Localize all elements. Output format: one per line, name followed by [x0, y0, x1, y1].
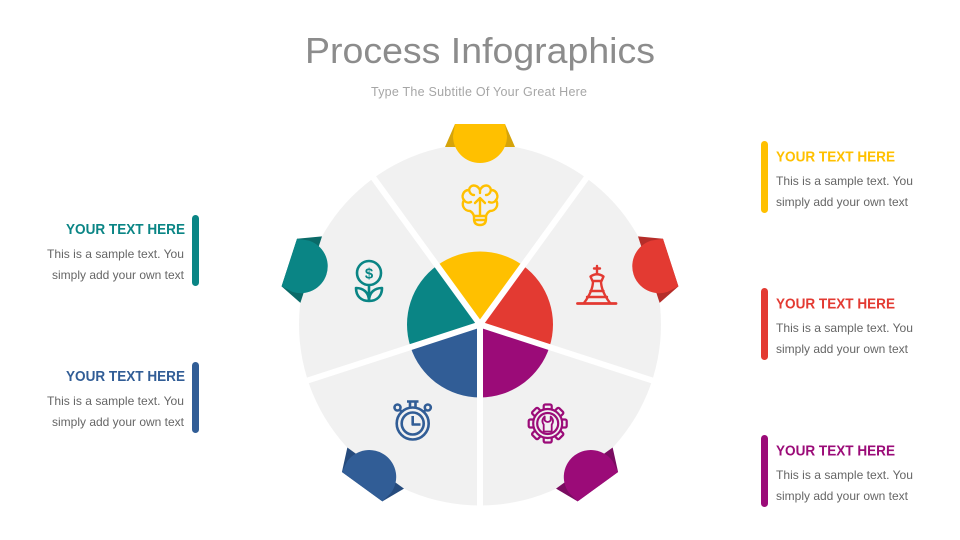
wheel spokes [305, 176, 655, 508]
icon: money plant: $ [365, 266, 374, 282]
callout: purple [761, 435, 913, 507]
callout: yellow: YOUR TEXT HERE [776, 150, 895, 166]
hub sector: purple [445, 299, 558, 409]
callout: blue: YOUR TEXT HERE [66, 369, 185, 385]
callout: blue: simply add your own text [52, 415, 185, 429]
hub sector: yellow [437, 252, 523, 324]
callout: red: YOUR TEXT HERE [776, 296, 895, 312]
tab: red [623, 229, 682, 308]
subtitle: Type The Subtitle Of Your Great Here [371, 85, 587, 99]
callout: yellow: This is a sample text. You [776, 174, 913, 188]
callout: red: This is a sample text. You [776, 321, 913, 335]
hub sector: teal [397, 261, 493, 365]
icon: brain bulb [463, 186, 497, 225]
callout: yellow: simply add your own text [776, 195, 909, 209]
icon: gear with wrench [529, 404, 567, 442]
icon: chess king [578, 266, 616, 304]
tab: yellow [445, 124, 515, 163]
callout: teal: YOUR TEXT HERE [66, 222, 185, 238]
callout: blue: This is a sample text. You [47, 394, 184, 408]
icon: stopwatch [394, 402, 431, 440]
hub sector: blue [402, 299, 515, 409]
title: Process Infographics [305, 30, 655, 71]
icon: money plant [356, 261, 382, 301]
callout: purple: simply add your own text [776, 489, 909, 503]
hub sector: red [467, 261, 563, 365]
tab: teal [278, 229, 337, 308]
callout: teal: This is a sample text. You [47, 247, 184, 261]
callout: teal: simply add your own text [52, 268, 185, 282]
tab: blue [334, 435, 413, 507]
callout: purple: YOUR TEXT HERE [776, 444, 895, 460]
wheel background [299, 144, 661, 506]
callout: purple: This is a sample text. You [776, 468, 913, 482]
callout: red [761, 288, 913, 360]
tab: purple [547, 435, 626, 507]
callout: red: simply add your own text [776, 342, 909, 356]
callout: teal [47, 215, 199, 286]
callout: blue [47, 362, 199, 433]
callout: yellow [761, 141, 913, 213]
